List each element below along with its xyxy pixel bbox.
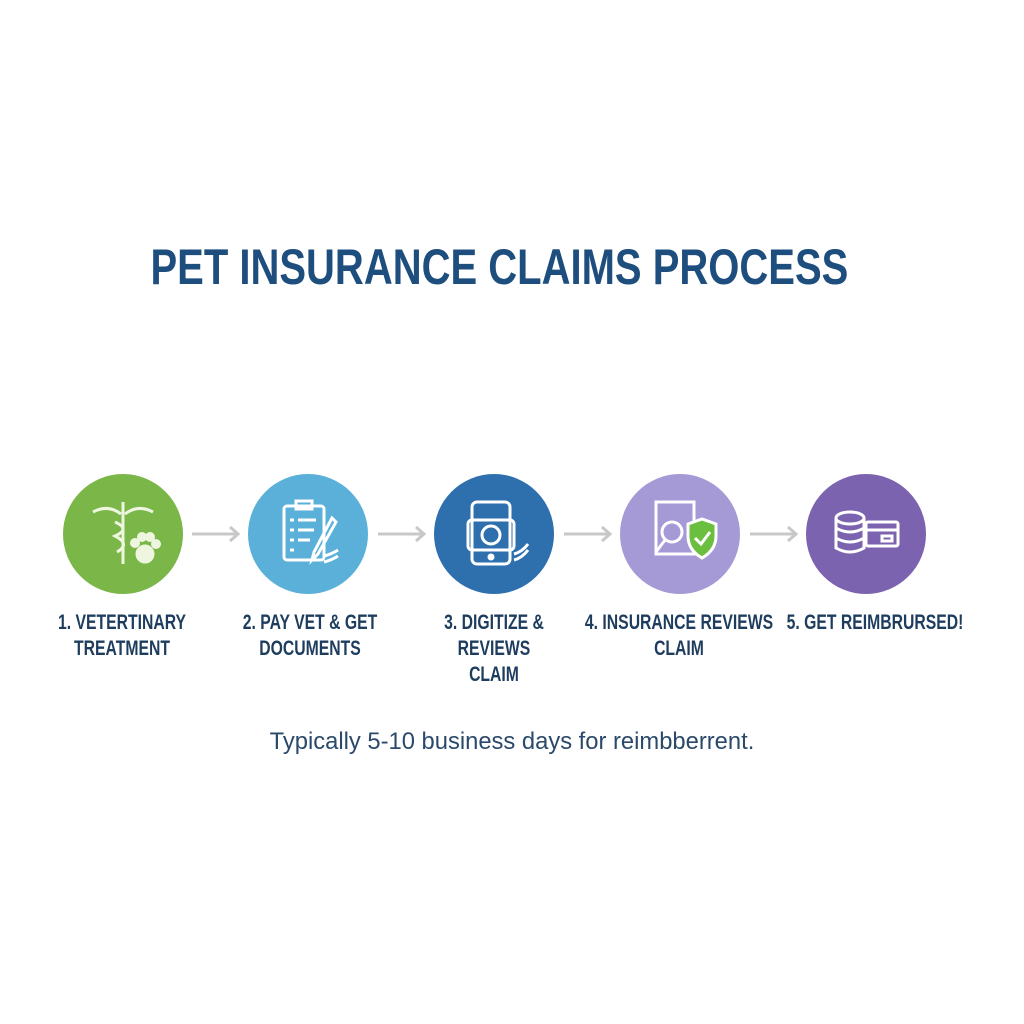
arrow 3 [564, 526, 612, 542]
label 3: CLAIM [469, 663, 519, 686]
label 1: 1. VETERTINARY [58, 611, 186, 634]
label 4: CLAIM [654, 637, 704, 660]
label 3: REVIEWS [458, 637, 530, 660]
label 1: TREATMENT [74, 637, 170, 660]
arrow 1 [192, 526, 240, 542]
label 3: 3. DIGITIZE & [444, 611, 544, 634]
label 2: DOCUMENTS [259, 637, 361, 660]
label 1 [58, 611, 186, 660]
step 4 icon: document with shield [620, 474, 740, 594]
label 3 [444, 611, 544, 686]
title: PET INSURANCE CLAIMS PROCESS [150, 239, 848, 295]
footnote: Typically 5-10 business days for reimbberrent. [270, 728, 754, 755]
step 1 icon: caduceus and paw [63, 474, 183, 594]
label 4 [585, 611, 773, 660]
arrow 4 [750, 526, 798, 542]
label 2: 2. PAY VET & GET [243, 611, 377, 634]
label 5: 5. GET REIMBRURSED! [787, 611, 963, 634]
label 4: 4. INSURANCE REVIEWS [585, 611, 773, 634]
step 5 icon: coins and card [806, 474, 926, 594]
step 3 icon: phone camera [434, 474, 554, 594]
step 2 icon: clipboard [248, 474, 368, 594]
label 2 [243, 611, 378, 660]
arrow 2 [378, 526, 426, 542]
